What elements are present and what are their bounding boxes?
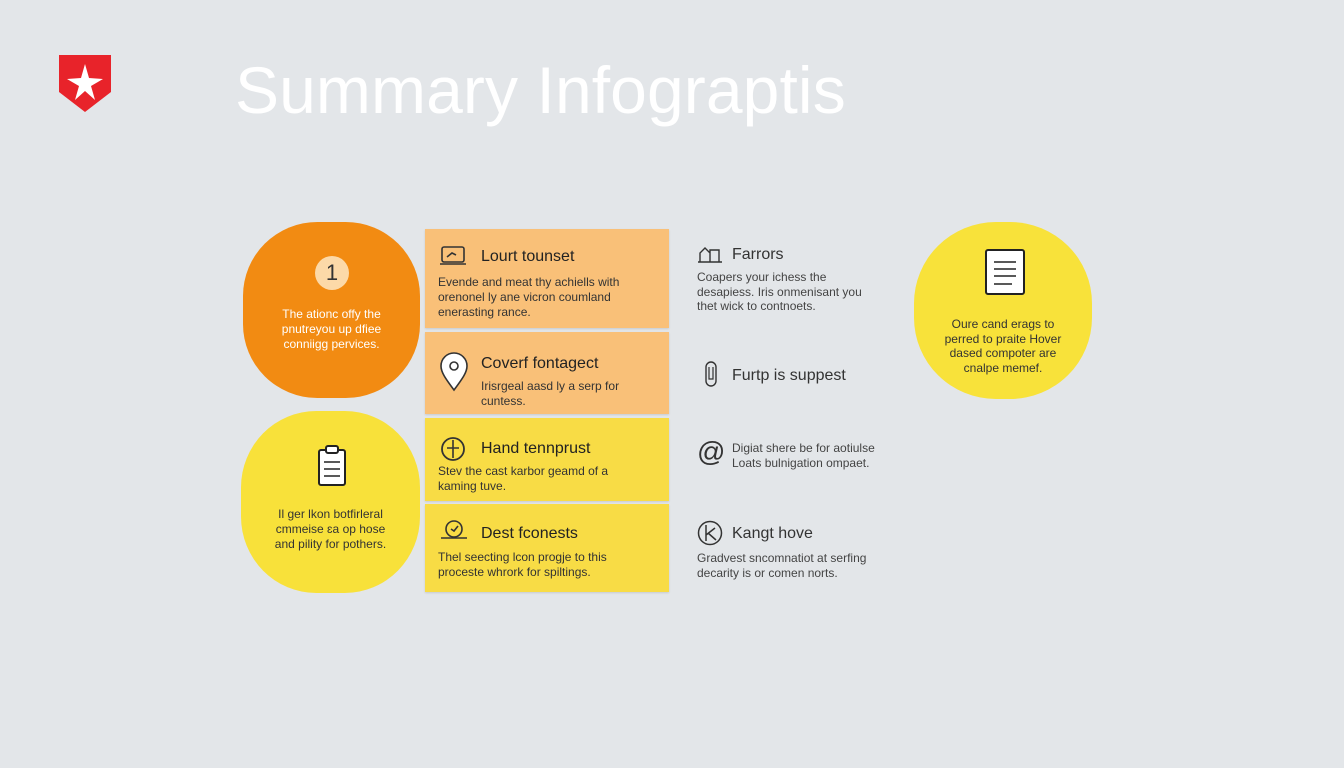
icon: circle k	[698, 520, 722, 546]
right item: Farrors: Farrors	[732, 246, 784, 263]
number badge	[315, 256, 349, 290]
right yellow circle panel	[914, 222, 1092, 399]
yellow blob text: Il ger lkon botfirleral cmmeise ɛa op hose and pility for pothers.	[275, 507, 386, 551]
card 2	[425, 332, 669, 414]
icon: monitor	[440, 246, 466, 265]
number badge: 1	[326, 260, 338, 285]
icon: document	[985, 249, 1025, 295]
card 2: Irisrgeal aasd ly a serp for cuntess.	[481, 379, 619, 408]
orange blob panel	[243, 222, 420, 398]
right item: Furtp	[705, 361, 846, 387]
card 4: Thel seecting lcon progje to this proceste whrork for spiltings.	[438, 550, 607, 579]
card 4: Dest fconests	[481, 525, 578, 542]
card 3	[425, 418, 669, 501]
card 2: Coverf fontagect	[481, 355, 598, 372]
icon: at sign: @	[697, 436, 725, 467]
card 3: Stev the cast karbor geamd of a kaming tuve.	[438, 464, 608, 493]
card 1	[425, 229, 669, 328]
right item: Kangt hove: Gradvest sncomnatiot at serfing decarity is or comen norts.	[697, 551, 866, 580]
title: Summary Infograptis	[235, 53, 846, 127]
right item: Farrors	[697, 246, 862, 313]
orange blob text: The ationc offy the pnutreyou up dfiee conniigg pervices.	[282, 307, 381, 351]
logo shield	[59, 55, 111, 112]
right item: Kangt hove: Kangt hove	[732, 525, 813, 542]
icon: circle plus	[441, 437, 465, 461]
right item: Kangt hove	[697, 520, 866, 580]
icon: buildings	[698, 247, 722, 263]
right item: Digiat	[697, 436, 875, 470]
card 4	[425, 504, 669, 592]
icon: badge	[441, 520, 467, 539]
icon: paperclip	[705, 361, 717, 387]
right item: Farrors: Coapers your ichess the desapiess. Iris onmenisant you thet wick to contnoets.	[697, 270, 862, 313]
card 3: Hand tennprust	[481, 440, 590, 457]
card 1: Evende and meat thy achiells with orenonel ly ane vicron coumland enerasting rance.	[438, 275, 619, 319]
yellow blob panel	[241, 411, 420, 593]
right circle text: Oure cand erags to perred to praite Hover dased compoter are cnalpe memef.	[945, 317, 1061, 374]
icon: clipboard	[318, 445, 346, 486]
icon: location pin	[440, 352, 468, 392]
card 1: Lourt tounset	[481, 248, 574, 265]
right item: Digiat: Digiat shere be for aotiulse Loats bulnigation ompaet.	[732, 441, 875, 470]
right item: Furtp: Furtp is suppest	[732, 367, 846, 384]
